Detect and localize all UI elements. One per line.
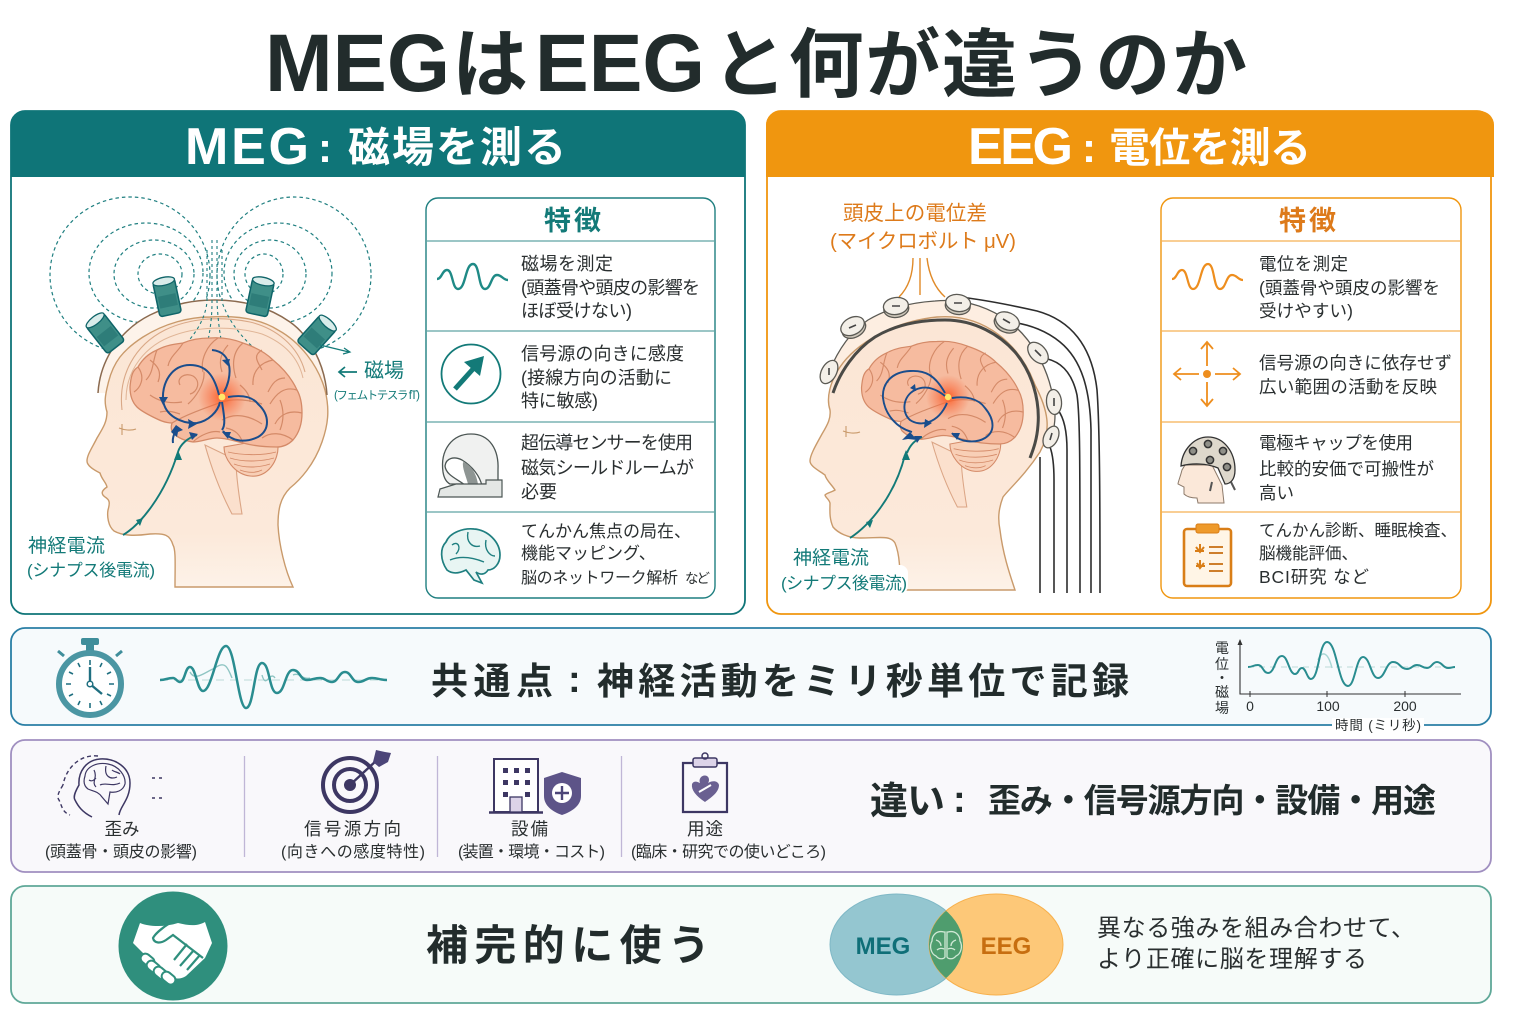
- label: facility: (装置・環境・コスト): [458, 843, 605, 861]
- row: measures magnetic field: (頭蓋骨や頭皮の影響を: [521, 278, 700, 298]
- row: measures magnetic field: ほぼ受けない): [521, 301, 632, 321]
- heading: commonality: 神経活動をミリ秒単位で記録: [597, 661, 1129, 702]
- row: cross arrows: 広い範囲の活動を反映: [1259, 377, 1437, 397]
- heading: differences: [870, 779, 1436, 823]
- title: は: [452, 23, 528, 108]
- EEG header: EEG: [968, 118, 1073, 176]
- row: source orientation: 信号源の向きに感度: [521, 344, 684, 364]
- chart: time course: 100: [1316, 698, 1340, 714]
- nerve current arrow: [850, 437, 922, 538]
- head silhouette: [87, 317, 328, 587]
- illustration: EEG head with electrodes: [810, 258, 1100, 593]
- text: summary: より正確に脳を理解する: [1097, 946, 1367, 973]
- panel: EEG: [766, 111, 1494, 614]
- row: measures potential: 受けやすい): [1259, 301, 1353, 321]
- converging field lines: [180, 240, 258, 355]
- text: summary: 異なる強みを組み合わせて、: [1097, 915, 1415, 942]
- EEG header: [766, 111, 1494, 177]
- icon: stopwatch: [58, 638, 122, 715]
- label: magnetic field: 磁場: [364, 359, 404, 382]
- label: scalp potential: 頭皮上の電位差: [843, 202, 987, 225]
- row: applications: てんかん焦点の局在、: [521, 522, 691, 541]
- row: applications: など: [685, 571, 710, 586]
- row: measures potential: (頭蓋骨や頭皮の影響を: [1259, 278, 1440, 298]
- EEG header: :: [1082, 124, 1096, 171]
- row: electrode cap: [1178, 433, 1434, 503]
- label: neural current: 神経電流: [28, 535, 105, 557]
- label: scalp potential: [830, 202, 1016, 253]
- waveform: [160, 646, 387, 708]
- MEG header: MEG: [185, 118, 309, 176]
- label: distortion: [45, 819, 197, 861]
- label: facility: [458, 819, 605, 861]
- row: clipboard: BCI研究 など: [1259, 567, 1369, 587]
- label: source orientation: (向きへの感度特性): [281, 843, 425, 861]
- dipole current loops: [163, 350, 267, 443]
- cap arc: [833, 320, 1038, 458]
- text: summary: [1097, 915, 1415, 973]
- title: [265, 18, 1247, 109]
- row: electrode cap: 高い: [1259, 483, 1294, 503]
- scalp arcs: [98, 300, 327, 395]
- card heading: 特徴: [544, 206, 601, 236]
- label: neural current: [27, 535, 155, 580]
- chart: time course: 場: [1215, 700, 1229, 716]
- label: neural current: (シナプス後電流): [781, 574, 907, 593]
- row: cross arrows: 信号源の向きに依存せず: [1259, 353, 1452, 373]
- chart: time course: [1215, 639, 1461, 733]
- cap band fill: [829, 300, 1055, 440]
- row: electrode cap: 電極キャップを使用: [1259, 433, 1413, 453]
- venn diagram: MEG: [856, 933, 910, 960]
- heading: commonality: :: [568, 659, 581, 701]
- row: electrode cap: 比較的安価で可搬性が: [1259, 459, 1434, 479]
- icon: target: [323, 750, 391, 812]
- row: measures potential: 電位を測定: [1259, 254, 1348, 274]
- chart: time course: 200: [1393, 698, 1417, 714]
- lead lines: [899, 258, 945, 297]
- heading: differences: 違い: [870, 781, 945, 823]
- eyebrow: [843, 426, 860, 437]
- venn diagram: EEG: [981, 933, 1031, 960]
- MEG header: :: [318, 124, 332, 171]
- row: measures potential: [1172, 254, 1440, 321]
- label: distortion: 歪み: [104, 819, 140, 839]
- row: applications: 脳のネットワーク解析: [521, 569, 678, 587]
- heading: complementary: 補完的に使う: [426, 922, 710, 969]
- label: neural current: [780, 547, 908, 594]
- row: applications: [442, 522, 710, 587]
- magnetic field lines: [50, 197, 371, 353]
- row: source orientation: 特に敏感): [521, 391, 598, 411]
- source glow: [926, 375, 970, 419]
- electrode wires: [960, 297, 1100, 593]
- label: neural current: (シナプス後電流): [27, 561, 155, 580]
- illustration: MEG head and brain: [50, 197, 371, 587]
- icon: facility: [489, 759, 581, 815]
- dipole current loops: [883, 371, 992, 441]
- chart: time course: 時間 (ミリ秒): [1335, 718, 1421, 733]
- label: source orientation: 信号源方向: [304, 819, 401, 839]
- title: MEG: [265, 18, 450, 109]
- label: facility: 設備: [511, 819, 548, 839]
- panel: MEG: [11, 111, 745, 614]
- eyebrow: [119, 424, 136, 435]
- head silhouette: [810, 317, 1047, 590]
- heading: differences: 歪み・信号源方向・設備・用途: [988, 782, 1436, 819]
- chart: time course: 磁: [1215, 684, 1229, 700]
- nerve current arrow: [123, 435, 197, 535]
- label: magnetic field: [320, 345, 420, 402]
- row: cross arrows: [1174, 342, 1452, 406]
- label: magnetic field: (フェムトテスラ fT): [334, 389, 420, 402]
- title: と何が違うのか: [712, 23, 1247, 107]
- row: superconducting sensor helmet: 必要: [521, 482, 557, 502]
- icon: brain in overlap: [931, 932, 961, 959]
- title: EEG: [535, 18, 705, 109]
- label: use: (臨床・研究での使いどころ): [631, 843, 826, 861]
- icon: clipboard use: [683, 753, 727, 812]
- row: clipboard: てんかん診断、睡眠検査、: [1259, 521, 1457, 540]
- row: applications: 機能マッピング、: [521, 544, 656, 563]
- label: scalp potential: (マイクロボルト μV): [830, 230, 1016, 253]
- band: commonality: [11, 628, 1491, 733]
- scalp fill: [98, 300, 327, 395]
- row: source orientation: [442, 344, 684, 411]
- row: measures magnetic field: 磁場を測定: [521, 254, 613, 274]
- row: superconducting sensor helmet: 超伝導センサーを使用: [521, 433, 693, 453]
- icon: distortion: [58, 756, 162, 817]
- chart: time course: 位: [1215, 656, 1229, 672]
- row: measures magnetic field: [437, 254, 700, 321]
- chart: time course: 電: [1215, 640, 1229, 656]
- venn diagram: [830, 894, 1063, 995]
- sensors: [84, 275, 339, 356]
- label: neural current: 神経電流: [793, 547, 869, 569]
- electrodes: [817, 293, 1063, 450]
- feature card: MEG: [426, 198, 715, 598]
- heading: commonality: 共通点: [431, 661, 553, 702]
- label: use: 用途: [687, 819, 723, 839]
- row: clipboard: 脳機能評価、: [1259, 544, 1358, 563]
- source glow: [198, 373, 246, 421]
- chart: time course: ・: [1215, 670, 1229, 686]
- band: differences: [11, 740, 1491, 872]
- label: source orientation: [281, 819, 425, 861]
- row: clipboard: [1184, 521, 1457, 587]
- heading: differences: :: [953, 779, 966, 821]
- row: superconducting sensor helmet: [438, 433, 694, 502]
- feature card: EEG: [1161, 198, 1461, 598]
- row: source orientation: (接線方向の活動に: [521, 368, 672, 388]
- band: complementary use: [11, 886, 1491, 1003]
- row: superconducting sensor helmet: 磁気シールドルームが: [521, 458, 694, 478]
- card heading: 特徴: [1279, 206, 1336, 236]
- EEG header: 電位を測る: [1109, 125, 1311, 171]
- MEG header: 磁場を測る: [348, 124, 566, 171]
- icon: handshake: [118, 892, 228, 1000]
- label: distortion: (頭蓋骨・頭皮の影響): [45, 843, 197, 861]
- chart: time course: 0: [1246, 698, 1254, 714]
- label: use: [631, 819, 826, 861]
- MEG header: [11, 111, 745, 177]
